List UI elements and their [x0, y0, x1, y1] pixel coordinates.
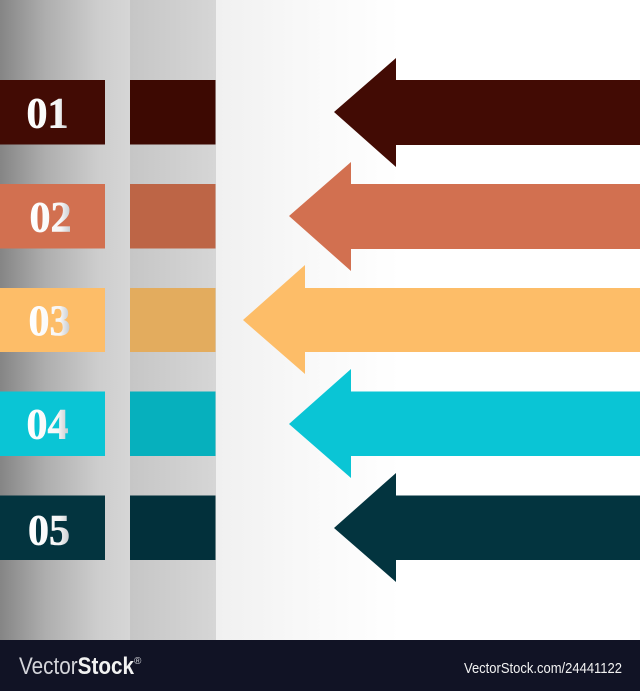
row 05 [0, 473, 640, 582]
label bar 02 [0, 184, 105, 248]
label bar 01 [0, 80, 105, 144]
shaded bar 04 [130, 392, 216, 456]
footer bar [0, 640, 640, 691]
shaded bar 02 [130, 184, 216, 248]
shaded bar 01 [130, 80, 216, 144]
arrow 05 [334, 473, 640, 582]
label bar 05 [0, 496, 105, 560]
label bar 03 [0, 288, 105, 352]
row 02 [0, 162, 640, 271]
shaded bar 05 [130, 496, 216, 560]
footer image id: VectorStock.com/24441122 [464, 661, 622, 677]
number 04: 04 [26, 402, 68, 448]
arrow 01 [334, 58, 640, 167]
row 03 [0, 265, 640, 374]
row 04 [0, 369, 640, 478]
arrow 04 [289, 369, 640, 478]
footer registered mark: ® [134, 656, 142, 667]
arrow 03 [243, 265, 640, 374]
background panel: fading white area [216, 0, 400, 640]
number 02: 02 [30, 194, 72, 242]
shaded bar 03 [130, 288, 216, 352]
number 03: 03 [28, 298, 70, 345]
arrow 02 [289, 162, 640, 271]
background panel: second column [130, 0, 216, 640]
background panel: left gradient column [0, 0, 130, 640]
footer logo: VectorStock [19, 653, 135, 680]
number 05: 05 [28, 508, 70, 554]
row 01 [0, 58, 640, 167]
label bar 04 [0, 392, 105, 456]
number 01: 01 [26, 90, 68, 138]
